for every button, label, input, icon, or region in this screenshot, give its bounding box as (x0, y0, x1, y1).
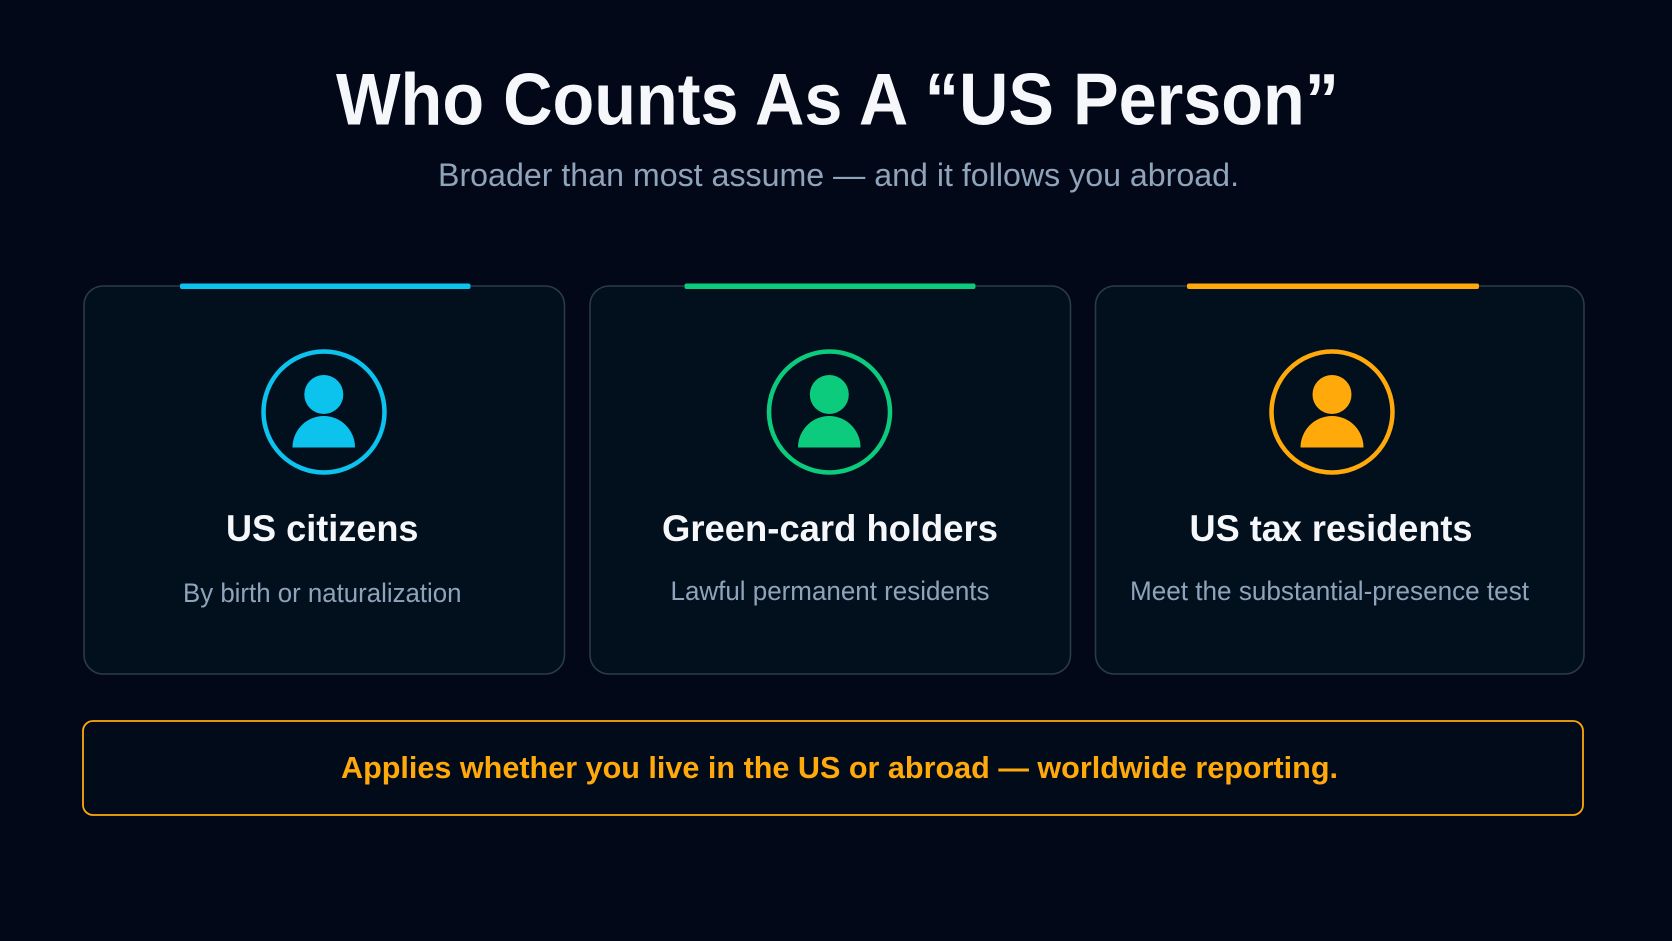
title: Who Counts As A “US Person” (336, 60, 1339, 140)
callout box (83, 721, 1583, 815)
accent bar (1187, 284, 1479, 289)
card description: Meet the substantial-presence test (1130, 576, 1529, 606)
icon: person (769, 352, 890, 472)
accent bar (180, 284, 470, 289)
card background (590, 286, 1070, 674)
icon: person (264, 352, 384, 472)
panel: US tax residents (1096, 284, 1584, 674)
accent bar (684, 284, 976, 289)
card heading: Green-card holders (662, 508, 998, 549)
callout (83, 721, 1583, 815)
card description: Lawful permanent residents (670, 576, 990, 606)
panel: Green-card holders (590, 284, 1070, 674)
card background (1096, 286, 1584, 674)
icon: person (1272, 352, 1392, 472)
callout text: Applies whether you live in the US or abroad — worldwide reporting. (341, 750, 1338, 785)
card heading: US tax residents (1190, 508, 1472, 549)
subtitle: Broader than most assume — and it follows you abroad. (438, 157, 1239, 193)
card heading: US citizens (226, 508, 418, 549)
card description: By birth or naturalization (183, 578, 462, 608)
card background (84, 286, 564, 674)
panel: US citizens (84, 284, 564, 674)
